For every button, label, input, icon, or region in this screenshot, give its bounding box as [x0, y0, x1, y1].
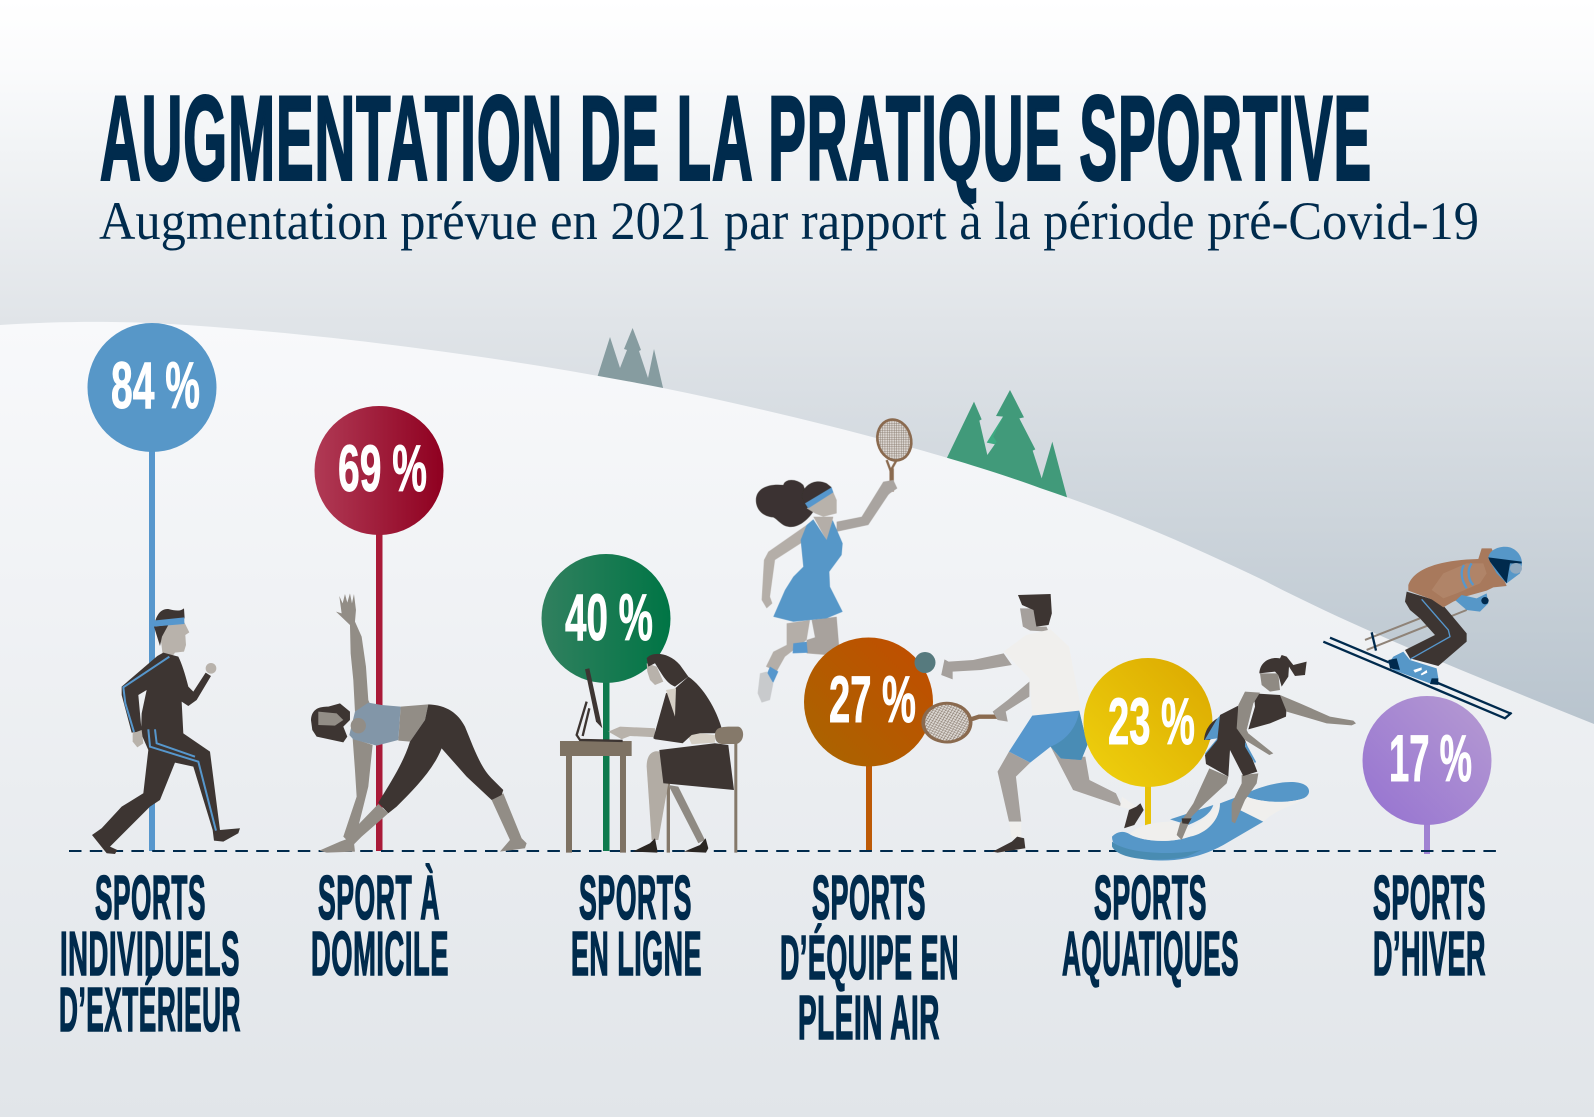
label: sports en ligne [571, 864, 702, 989]
figure: runner [92, 608, 240, 854]
stems [149, 445, 1430, 854]
figure: woman at computer [560, 654, 743, 853]
label: sports aquatiques [1062, 864, 1239, 989]
circle: 84 %: 84 % [111, 348, 200, 422]
circle: 40 % [542, 554, 670, 683]
circle: 84 % [88, 323, 216, 452]
circle: 27 % [804, 638, 933, 766]
text: DOMICILE [311, 920, 449, 989]
trees: green [947, 390, 1067, 498]
circle: 69 % [314, 406, 444, 535]
figure: tennis woman [756, 416, 916, 703]
text: D’EXTÉRIEUR [59, 976, 241, 1045]
figure: surfer [1112, 655, 1356, 860]
circle: 40 %: 40 % [565, 580, 653, 654]
text: SPORTS [579, 864, 692, 933]
label: sports d'équipe en plein air: SPORTS [812, 864, 926, 933]
circle: 69 %: 69 % [338, 431, 427, 505]
circle: 17 % [1362, 696, 1492, 825]
label: sports d'hiver [1373, 864, 1486, 989]
label: sports d'équipe en plein air [780, 864, 959, 1053]
figure: tennis ball [914, 652, 936, 673]
circle: 17 %: 17 % [1389, 721, 1472, 795]
figure: yoga [311, 593, 527, 853]
label: sports d'équipe en plein air: PLEIN AIR [798, 984, 940, 1053]
text: SPORT À [318, 864, 440, 933]
text: D’ÉQUIPE EN [780, 924, 959, 993]
circle: 27 %: 27 % [829, 662, 916, 736]
label: sport à domicile [311, 864, 449, 989]
figure: skier [1323, 547, 1522, 718]
text: EN LIGNE [571, 920, 702, 989]
circle: 23 %: 23 % [1108, 684, 1195, 758]
text: AQUATIQUES [1062, 920, 1239, 989]
circle: 23 % [1084, 658, 1212, 787]
figure: tennis man [919, 594, 1144, 853]
baseline dashes [69, 850, 1498, 852]
text: INDIVIDUELS [60, 920, 240, 989]
label: sports individuels d'extérieur [59, 864, 241, 1045]
subtitle: Augmentation prévue en 2021 par rapport à la période pré-Covid-19 [99, 191, 1479, 251]
label: sports individuels d'extérieur: SPORTS [95, 864, 206, 933]
foreground snow hill [0, 322, 1594, 1117]
label: sports aquatiques: SPORTS [1094, 864, 1207, 933]
trees: grey [597, 328, 664, 392]
